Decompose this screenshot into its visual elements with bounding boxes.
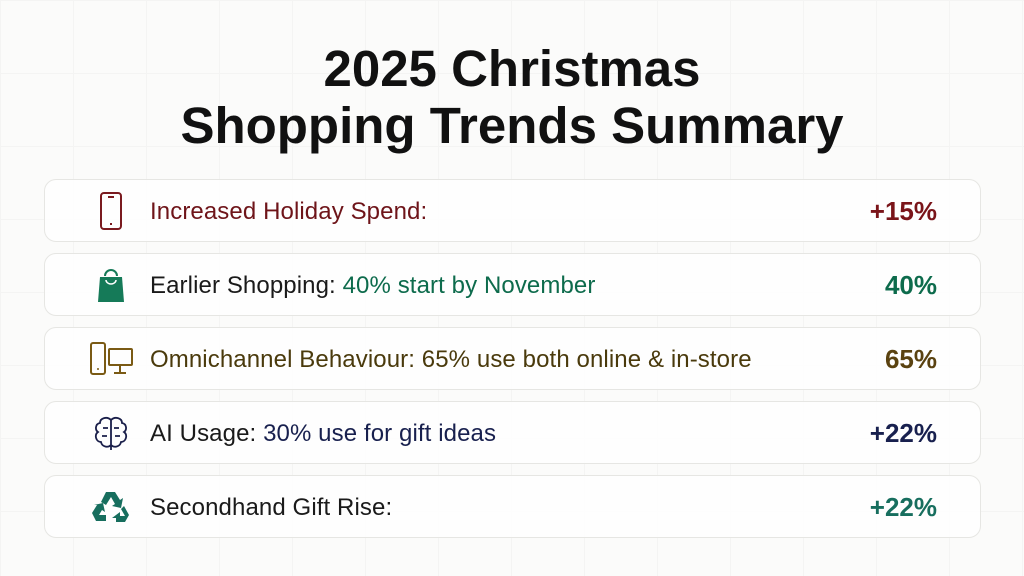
text: Increased Holiday Spend: xyxy=(150,198,427,225)
icon: phone xyxy=(100,192,122,230)
title: 2025 Christmas xyxy=(323,40,701,97)
value: +22% xyxy=(870,418,937,448)
value: +15% xyxy=(870,196,937,226)
row: ai usage xyxy=(44,401,981,464)
text: Secondhand Gift Rise: xyxy=(150,494,392,521)
icon: phone and monitor xyxy=(90,342,133,375)
value: +22% xyxy=(870,492,937,522)
row: omnichannel xyxy=(44,327,981,390)
row: secondhand xyxy=(44,475,981,538)
row: increased holiday spend xyxy=(44,179,981,242)
text: Omnichannel Behaviour: 65% use both online & in-store xyxy=(150,346,752,373)
row: earlier shopping xyxy=(44,253,981,316)
value: 40% xyxy=(885,270,937,300)
title: Shopping Trends Summary xyxy=(180,97,844,154)
icon: shopping bag xyxy=(98,269,124,302)
title xyxy=(180,40,844,154)
icon: recycle xyxy=(92,492,129,522)
icon: brain xyxy=(94,416,128,450)
text: Earlier Shopping: 40% start by November xyxy=(150,272,595,299)
text: AI Usage: 30% use for gift ideas xyxy=(150,420,496,447)
value: 65% xyxy=(885,344,937,374)
